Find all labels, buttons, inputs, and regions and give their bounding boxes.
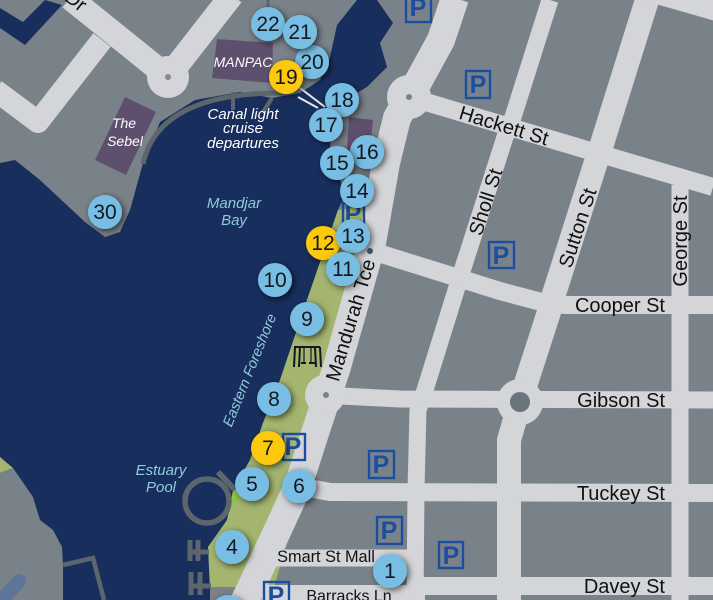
parking signs: P <box>345 200 361 228</box>
place labels: Estuary <box>136 462 188 479</box>
green foreshore <box>208 205 372 600</box>
foreshore south land <box>210 587 250 600</box>
footbridge <box>298 88 325 108</box>
street labels: George St <box>670 195 692 287</box>
numbered markers: 8 <box>268 388 280 411</box>
numbered markers: 6 <box>293 475 305 498</box>
place labels: Sebel <box>107 133 144 149</box>
numbered markers: 5 <box>246 473 258 496</box>
numbered markers: 14 <box>345 180 369 203</box>
numbered markers: 16 <box>355 141 379 164</box>
numbered markers: 11 <box>332 258 354 281</box>
street labels: Mandurah Tce <box>322 257 380 384</box>
place labels: Canal light <box>208 106 279 123</box>
place labels: Eastern Foreshore <box>220 312 280 429</box>
street labels: Davey St <box>584 576 665 598</box>
numbered markers: 22 <box>256 13 280 36</box>
numbered markers: 15 <box>325 152 349 175</box>
water: top left canal <box>0 0 62 45</box>
numbered markers: 18 <box>330 89 354 112</box>
numbered markers: 1 <box>384 560 396 583</box>
numbered markers: 9 <box>301 308 313 331</box>
buildings <box>95 39 373 175</box>
place labels: cruise <box>223 120 263 137</box>
parking signs: P <box>470 71 486 99</box>
street labels: Hackett St <box>456 102 552 150</box>
bright green nub <box>231 490 240 508</box>
place labels: departures <box>207 135 279 152</box>
place labels: Pool <box>146 479 177 496</box>
numbered markers: 21 <box>288 21 312 44</box>
place labels: Mandjar <box>207 195 262 212</box>
street labels: Gibson St <box>577 390 665 412</box>
water: Mandjar Bay and Estuary Pool <box>0 0 393 600</box>
place labels: MANPAC <box>214 54 273 70</box>
street labels: Cooper St <box>575 295 665 317</box>
parking signs: P <box>443 542 459 570</box>
numbered markers: 12 <box>311 232 335 255</box>
place labels: The <box>112 115 136 131</box>
quay walls and jetties <box>143 0 285 595</box>
place labels: Bay <box>221 212 248 229</box>
place labels <box>107 54 280 496</box>
west land <box>0 468 63 600</box>
parking signs: P <box>493 242 509 270</box>
west quay outline <box>63 558 104 600</box>
street labels: Smart St Mall <box>277 548 375 566</box>
numbered markers: 20 <box>300 51 324 74</box>
numbered markers: 10 <box>263 269 287 292</box>
numbered markers: 17 <box>314 114 338 137</box>
street labels: Tuckey St <box>577 483 665 505</box>
parking signs: P <box>373 451 389 479</box>
parking signs <box>264 0 514 600</box>
numbered markers: 7 <box>262 437 274 460</box>
parking signs: P <box>381 517 397 545</box>
icon: swings <box>294 347 321 367</box>
street labels: Sutton St <box>555 185 602 271</box>
parking signs: P <box>285 433 301 461</box>
numbered markers: 4 <box>226 536 238 559</box>
numbered markers: 30 <box>93 201 117 224</box>
west path <box>0 581 19 600</box>
street labels: Sholl St <box>465 166 508 238</box>
numbered markers: 13 <box>341 225 365 248</box>
roundabouts <box>147 56 543 425</box>
west green edge <box>0 457 13 473</box>
numbered markers <box>88 7 407 600</box>
numbered markers: 19 <box>274 66 298 89</box>
